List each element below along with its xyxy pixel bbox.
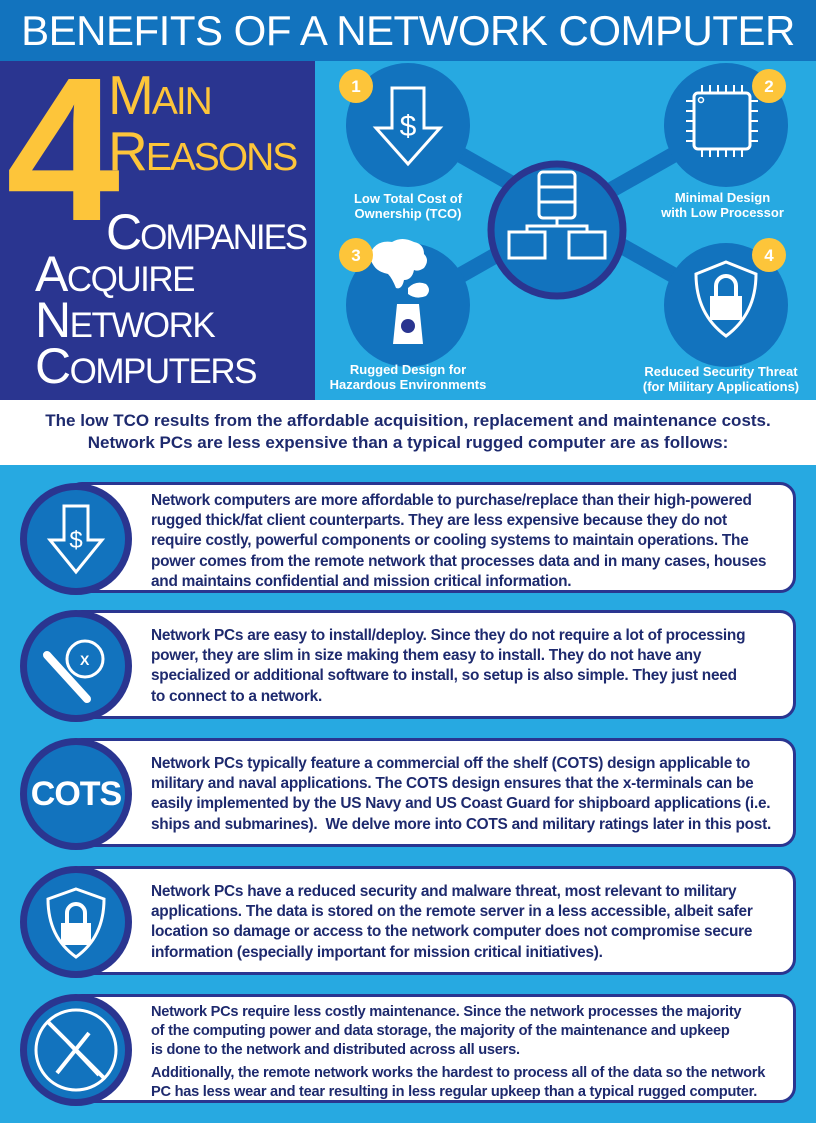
card 5: Network PCs require less costly maintenance. Since the network processes the majority	[151, 1004, 741, 1020]
label 3: Hazardous Environments	[330, 377, 486, 392]
icon: COTS: COTS	[31, 775, 121, 813]
card 5: of the computing power and data storage, the majority of the maintenance and upkeep	[151, 1023, 730, 1039]
card 3	[66, 738, 796, 847]
icon: wrench stopwatch: X	[80, 652, 90, 668]
card 1: and maintains confidential and mission critical information.	[151, 573, 571, 590]
badges	[339, 69, 786, 272]
card 3: Network PCs typically feature a commercial off the shelf (COTS) design applicable to	[151, 755, 750, 772]
card 4	[66, 866, 796, 975]
label 2: with Low Processor	[661, 205, 784, 220]
circle 1	[346, 63, 470, 187]
badges: 2	[764, 77, 774, 96]
label 4: Reduced Security Threat	[644, 364, 798, 379]
card 1: require costly, powerful components or cooling systems to maintain operations. The	[151, 532, 749, 549]
card 2: specialized or additional software to install, so setup is also simple. They just need	[151, 667, 737, 684]
icon: wrench stopwatch	[20, 610, 132, 722]
card 5: is done to the network and distributed across all users.	[151, 1042, 520, 1058]
card 5	[66, 994, 796, 1103]
card 4: location so damage or access to the network computer does not compromise secure	[151, 923, 752, 940]
badges: 3	[351, 246, 361, 265]
intro text: The low TCO results from the affordable acquisition, replacement and maintenance costs.	[45, 411, 771, 430]
card 5: PC has less wear and tear resulting in less regular upkeep than a typical rugged computer.	[151, 1084, 757, 1100]
panel: left title	[0, 61, 315, 400]
acquire text: Computers	[35, 338, 256, 394]
icon: COTS	[20, 738, 132, 850]
badges: 1	[351, 77, 361, 96]
card 2: to connect to a network.	[151, 688, 322, 705]
main reasons text	[108, 64, 296, 182]
card 1: power comes from the remote network that processes data and in many cases, houses	[151, 553, 766, 570]
card 1: Network computers are more affordable to purchase/replace than their high-powered	[151, 492, 752, 509]
acquire text: Acquire	[35, 246, 194, 302]
card 5: Additionally, the remote network works the hardest to process all of the data so the network	[151, 1065, 765, 1081]
circle 1: $	[400, 110, 417, 143]
main reasons text: Reasons	[108, 120, 296, 182]
label 4	[643, 364, 799, 394]
card 2: power, they are slim in size making them easy to install. They do not have any	[151, 647, 701, 664]
intro text	[0, 400, 816, 465]
card 3: military and naval applications. The COTS design ensures that the x-terminals can be	[151, 775, 754, 792]
card 1	[66, 482, 796, 593]
icon: dollar arrow	[20, 483, 132, 595]
intro text: Network PCs are less expensive than a typical rugged computer are as follows:	[88, 433, 728, 452]
circle 3	[346, 239, 470, 367]
companies text: Companies	[106, 204, 306, 260]
header title: BENEFITS OF A NETWORK COMPUTER	[21, 7, 795, 54]
label 1: Ownership (TCO)	[355, 206, 461, 221]
circle 4	[664, 243, 788, 367]
label 3	[330, 362, 486, 392]
center network circle	[491, 164, 623, 296]
card 3: easily implemented by the US Navy and US Coast Guard for shipboard applications (i.e.	[151, 795, 770, 812]
panel: right diagram	[339, 63, 788, 367]
circle 2	[664, 63, 788, 187]
label 1: Low Total Cost of	[354, 191, 462, 206]
badges: 4	[764, 246, 774, 265]
label 1	[354, 191, 462, 221]
main reasons text: Main	[108, 64, 211, 126]
label 2	[661, 190, 784, 220]
acquire text: Network	[35, 292, 214, 348]
label 2: Minimal Design	[675, 190, 770, 205]
label 3: Rugged Design for	[350, 362, 466, 377]
icon: no tools	[20, 994, 132, 1106]
icon: shield lock	[20, 866, 132, 978]
card 4: Network PCs have a reduced security and malware threat, most relevant to military	[151, 883, 736, 900]
card 4: information (especially important for mission critical initiatives).	[151, 944, 603, 961]
acquire text	[35, 246, 256, 394]
card 3: ships and submarines). We delve more into COTS and military ratings later in this post.	[151, 816, 771, 833]
card 2	[66, 610, 796, 719]
icon: dollar arrow: $	[69, 527, 83, 554]
big 4: 4	[6, 35, 120, 264]
card 2: Network PCs are easy to install/deploy. Since they do not require a lot of processing	[151, 627, 745, 644]
label 4: (for Military Applications)	[643, 379, 799, 394]
card 4: applications. The data is stored on the remote server in a less accessible, albeit safer	[151, 903, 753, 920]
card 1: rugged thick/fat client counterparts. They are less expensive because they do not	[151, 512, 727, 529]
